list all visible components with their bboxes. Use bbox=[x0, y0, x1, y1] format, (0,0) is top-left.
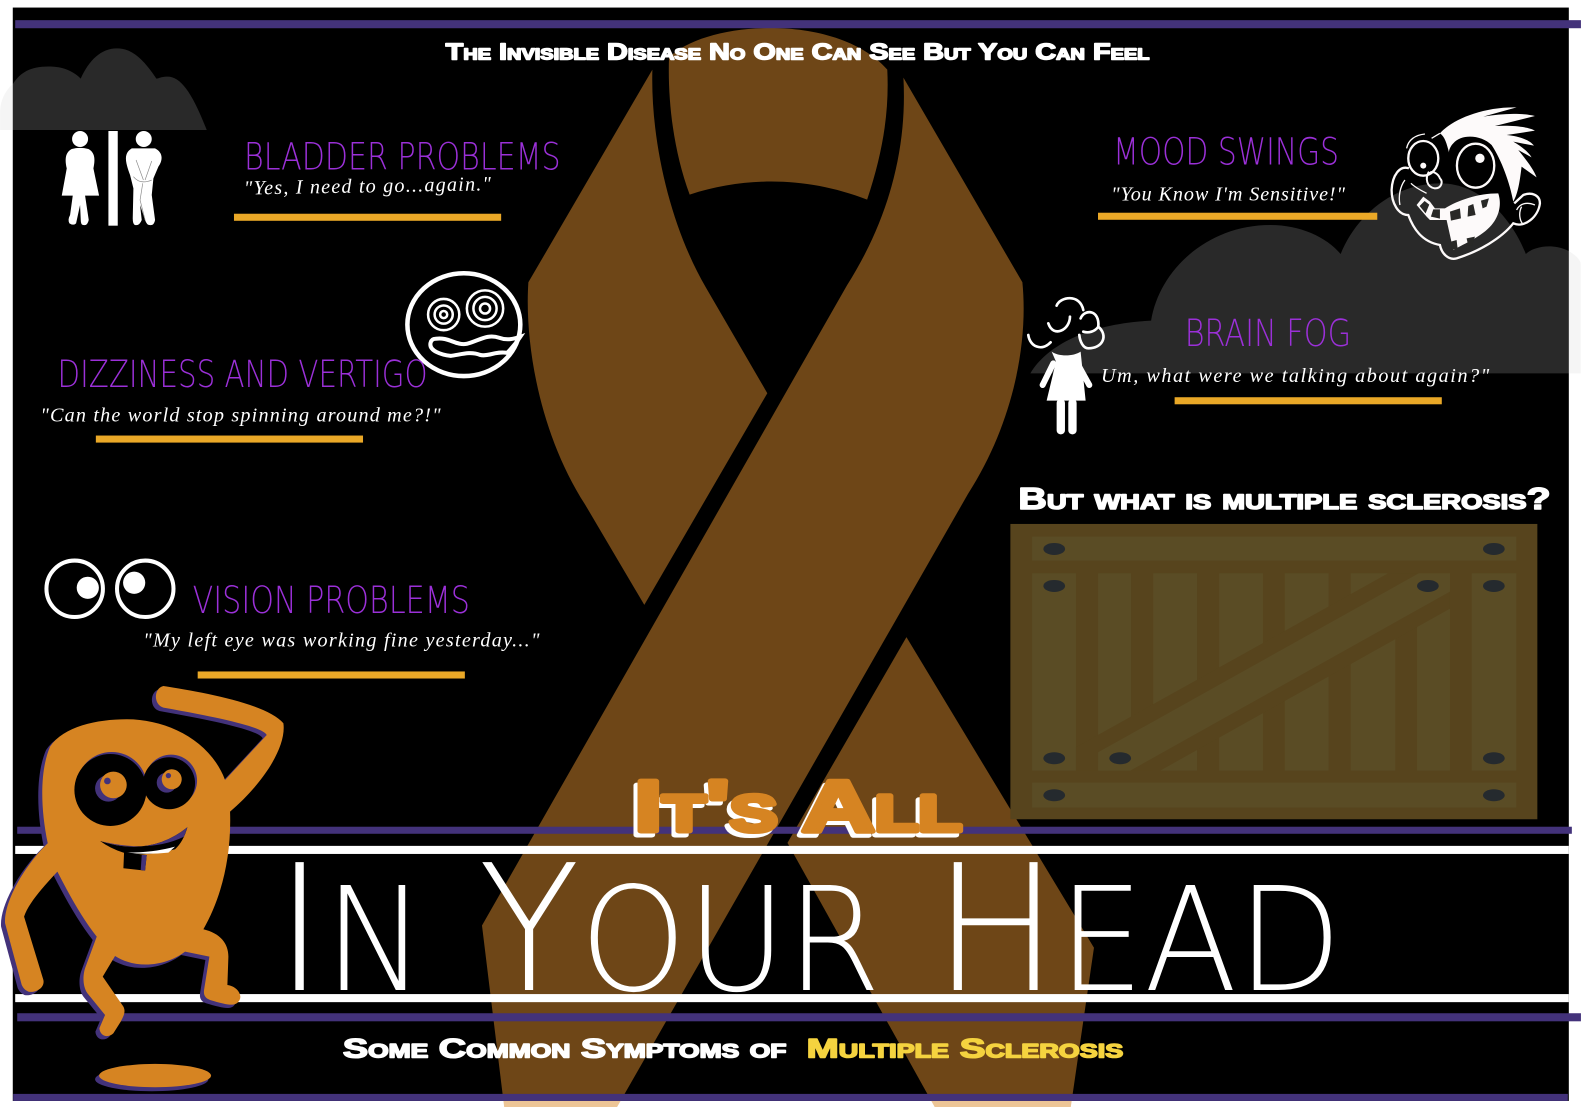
underline: vision bbox=[198, 671, 465, 679]
heading: brain fog: BRAIN FOG bbox=[1185, 311, 1351, 355]
icon: restroom figures bbox=[62, 131, 162, 226]
icon: figure with cloud head bbox=[1028, 298, 1103, 434]
quote: brain fog: Um, what were we talking about again?" bbox=[1101, 365, 1490, 387]
awareness ribbon bbox=[482, 28, 1094, 1107]
subtitle: multiple sclerosis: Multiple Sclerosis bbox=[807, 1033, 1123, 1064]
underline: dizziness bbox=[96, 436, 363, 443]
question: but what is multiple sclerosis: But what is multiple sclerosis? bbox=[1018, 483, 1551, 516]
crate panel bbox=[1010, 524, 1537, 819]
underline: mood bbox=[1098, 213, 1377, 220]
icon: dizzy face bbox=[407, 273, 520, 376]
quote: bladder: "Yes, I need to go...again." bbox=[244, 173, 492, 200]
icon: crazy face bbox=[1392, 107, 1540, 259]
quote: vision: "My left eye was working fine yesterday..." bbox=[143, 629, 540, 651]
character: orange mascot bbox=[1, 686, 284, 1091]
heading: mood swings: MOOD SWINGS bbox=[1113, 129, 1339, 173]
heading: it's all: It's All bbox=[634, 766, 962, 847]
heading: vision problems: VISION PROBLEMS bbox=[193, 578, 470, 622]
heading: dizziness and vertigo: DIZZINESS AND VERTIGO bbox=[58, 352, 428, 396]
cloud: top right bbox=[1030, 183, 1581, 373]
quote: mood: "You Know I'm Sensitive!" bbox=[1111, 184, 1346, 206]
underline: bladder bbox=[234, 214, 501, 221]
title: The Invisible Disease No One Can See But You Can Feel bbox=[446, 38, 1150, 64]
heading: bladder problems: BLADDER PROBLEMS bbox=[244, 134, 561, 178]
main title: in your head: IN YOUR HEAD bbox=[275, 828, 1342, 1032]
cloud: top left bbox=[0, 48, 207, 130]
quote: dizziness: "Can the world stop spinning around me?!" bbox=[40, 404, 441, 426]
icon: eyes bbox=[46, 561, 173, 617]
underline: brain fog bbox=[1175, 397, 1442, 404]
subtitle: some common symptoms: Some Common Symptoms of bbox=[343, 1033, 786, 1064]
